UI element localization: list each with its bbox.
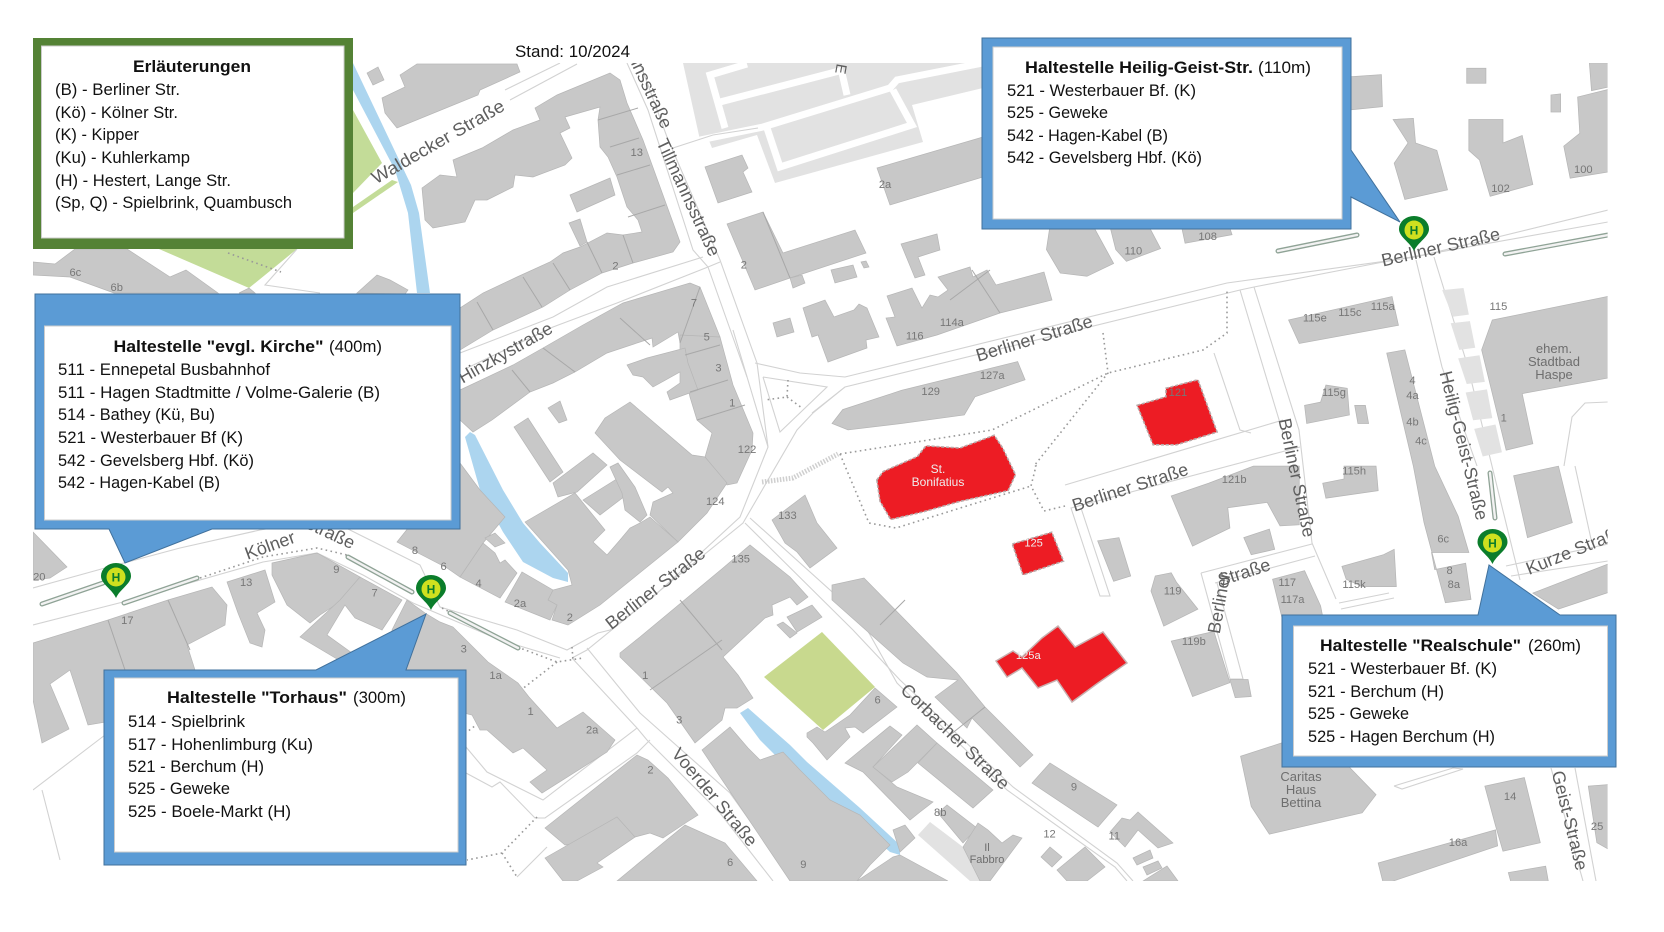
house numbers: 2a [879,179,892,191]
callout: Haltestelle Torhaus: Haltestelle "Torhaus" [167,688,347,707]
callout: Haltestelle evgl. Kirche: (400m) [329,337,382,356]
map place names: Haus [1286,782,1317,797]
house numbers: 13 [631,147,643,159]
house numbers: 117 [1278,577,1296,589]
house numbers: 5 [704,332,710,344]
house numbers: 122 [738,444,756,456]
icon: bus stop pin Heilig-Geist-Str. [1399,216,1429,251]
street names: Berliner [1204,571,1234,635]
street names: Geist-Straße [1548,769,1592,872]
callout: Haltestelle Heilig-Geist-Str.: 521 - Westerbauer Bf. (K) [1007,81,1196,100]
house numbers: 2 [612,261,619,273]
house numbers: 2a [586,724,599,736]
icon: bus stop pin Torhaus [416,575,446,610]
street names: Berliner Straße [1275,416,1319,539]
icon: bus stop pin Heilig-Geist-Str.: H [1410,224,1418,238]
street names: Tillmannsstraße [605,8,677,132]
callout: Haltestelle evgl. Kirche: 542 - Gevelsberg Hbf. (Kö) [58,451,254,470]
house numbers: 7 [372,587,378,599]
street names: Hinzkystraße [455,318,556,387]
callout: Haltestelle evgl. Kirche [35,294,460,563]
map light areas [683,63,990,881]
map red building 125a [996,626,1127,702]
house numbers [33,147,1603,871]
house numbers: 1 [1501,412,1507,424]
house numbers: 121b [1222,474,1247,486]
house numbers: 133 [778,510,797,522]
house numbers: 119 [1164,585,1182,597]
map service roads [700,63,983,167]
house numbers: 115k [1342,579,1366,591]
house numbers: 8a [1448,579,1461,591]
house numbers: 4c [1415,436,1427,448]
street names: Voerder Straße [668,744,761,850]
callout: Haltestelle Torhaus: 517 - Hohenlimburg (Ku) [128,735,313,754]
callout: Haltestelle evgl. Kirche: 521 - Westerbauer Bf (K) [58,428,243,447]
house numbers: 115h [1342,465,1366,477]
house numbers: 20 [33,571,45,583]
footbridge [762,454,838,482]
street names: Kölner [242,527,298,564]
house numbers: 115c [1338,307,1362,319]
panel: Erläuterungen: (Kö) - Kölner Str. [55,103,178,122]
street names [242,8,1629,872]
house numbers: 6c [1437,533,1450,545]
house numbers: 110 [1124,246,1142,258]
map red buildings [877,380,1217,575]
map place names: Bonifatius [912,475,964,489]
house numbers: 14 [1504,791,1516,803]
callout: Haltestelle Torhaus [104,614,466,865]
house numbers: 3 [461,644,467,656]
map place names [912,341,1580,866]
callout: Haltestelle Heilig-Geist-Str.: 542 - Gevelsberg Hbf. (Kö) [1007,148,1202,167]
house numbers: 6 [875,695,881,707]
house numbers: 1 [642,670,648,682]
house numbers: 6 [440,561,447,573]
house numbers: 6c [69,267,82,279]
street names: Corbacher Straße [897,680,1014,794]
callout: Haltestelle Realschule: 521 - Westerbauer Bf. (K) [1308,659,1497,678]
callout: Haltestelle Realschule: Haltestelle "Realschule" [1320,636,1521,655]
house numbers: 124 [706,496,725,508]
callout: Haltestelle Torhaus: (300m) [353,688,406,707]
street names: Heilig-Geist-Straße [1436,369,1492,522]
map place names: ehem. [1536,341,1572,356]
house numbers: 108 [1198,231,1217,243]
house numbers: 125a [1016,650,1041,662]
callout: Haltestelle Heilig-Geist-Str.: (110m) [1258,58,1311,77]
house numbers: 1a [489,670,503,682]
map footpaths [200,253,1227,877]
callout: Haltestelle Torhaus: 525 - Geweke [128,779,230,798]
callout: Haltestelle Heilig-Geist-Str.: Haltestelle Heilig-Geist-Str. [1025,58,1253,77]
callout: Haltestelle Realschule [1282,565,1616,767]
street names: Tillmannsstraße [652,136,724,259]
house numbers: 115e [1303,313,1327,325]
callout: Haltestelle evgl. Kirche: 511 - Hagen Stadtmitte / Volme-Galerie (B) [58,383,380,402]
icon: bus stop pin Kölner Straße: H [112,570,120,584]
house numbers: 13 [240,577,252,589]
house numbers: 3 [715,362,722,374]
callout: Haltestelle evgl. Kirche: Haltestelle "evgl. Kirche" [114,337,324,356]
icon: bus stop pin Kölner Straße [101,563,131,598]
house numbers: 12 [1043,828,1056,840]
map water [353,63,900,855]
callout: Haltestelle Heilig-Geist-Str.: 525 - Geweke [1007,103,1108,122]
house numbers: 135 [731,553,750,565]
house numbers: 7 [691,298,697,310]
house numbers: 4 [476,578,482,590]
map place names: Stadtbad [1528,354,1580,369]
house numbers: 9 [800,859,806,871]
house numbers: 11 [1108,830,1120,842]
house numbers: 1 [528,706,534,718]
callout: Haltestelle Realschule: (260m) [1528,636,1581,655]
house numbers: 16a [1449,837,1468,849]
house numbers: 4b [1406,417,1419,429]
house numbers: 119b [1182,636,1206,648]
panel: Erläuterungen: (H) - Hestert, Lange Str. [55,171,231,190]
map place names: Haspe [1535,367,1573,382]
house numbers: 2a [514,598,527,610]
house numbers: 4a [1406,390,1419,402]
callout: Haltestelle Torhaus: 525 - Boele-Markt (H) [128,802,291,821]
house numbers: 17 [121,615,134,627]
house numbers: 4 [1409,375,1416,387]
house numbers: 129 [921,386,940,398]
callout: Haltestelle Realschule: 525 - Hagen Berchum (H) [1308,727,1495,746]
panel: Erläuterungen: (Ku) - Kuhlerkamp [55,148,190,167]
house numbers: 100 [1574,164,1593,176]
map place names: Bettina [1281,795,1322,810]
map place names: Caritas [1280,769,1322,784]
house numbers: 115 [1490,301,1507,313]
street names: Berliner Straße [1069,459,1191,516]
panel: Erläuterungen [33,38,353,249]
map place names: Il [984,842,990,854]
house numbers: 1 [729,397,735,409]
house numbers: 121 [1169,387,1187,399]
callout: Haltestelle Realschule: 525 - Geweke [1308,704,1409,723]
house numbers: 115g [1322,387,1346,399]
icon: bus stop pin Realschule [1478,529,1508,564]
panel: Erläuterungen: (B) - Berliner Str. [55,80,180,99]
house numbers: 114a [940,317,965,329]
map place names: St. [931,462,945,476]
house numbers: 115a [1371,301,1396,313]
street names: Kurze Straße [1523,520,1629,579]
callout: Haltestelle evgl. Kirche: 511 - Ennepetal Busbahnhof [58,360,270,379]
house numbers: 9 [333,564,339,576]
street names: Straße [301,512,358,553]
stand date: Stand: 10/2024 [515,42,630,61]
street names: Straße [1215,554,1273,590]
icon: bus stop pin Torhaus: H [427,582,435,596]
house numbers: 2 [567,612,573,624]
house numbers: 2 [647,765,654,777]
street names: Berliner Straße [601,543,709,633]
house numbers: 25 [1591,821,1603,833]
callout: Haltestelle evgl. Kirche: 542 - Hagen-Kabel (B) [58,473,220,492]
map place names: Fabbro [970,854,1004,866]
map parks [159,110,875,730]
street names: E [831,62,850,75]
callout: Haltestelle Realschule: 521 - Berchum (H) [1308,682,1444,701]
callout: Haltestelle Heilig-Geist-Str.: 542 - Hagen-Kabel (B) [1007,126,1168,145]
house numbers: 2 [741,259,747,271]
house numbers: 125 [1024,538,1043,550]
house numbers: 8b [934,807,946,819]
house numbers: 9 [1071,782,1077,794]
house numbers: 117a [1281,594,1305,606]
map buildings west [33,64,1178,881]
callout: Haltestelle evgl. Kirche: 514 - Bathey (Kü, Bu) [58,405,215,424]
house numbers: 127a [980,370,1005,382]
panel: Erläuterungen: Erläuterungen [133,57,251,76]
house numbers: 102 [1491,183,1510,195]
house numbers: 8 [412,545,418,557]
panel: Erläuterungen: (K) - Kipper [55,125,139,144]
street names: Berliner Straße [973,311,1095,366]
house numbers: 3 [676,715,682,727]
map buildings east [832,63,1616,884]
panel: Erläuterungen: (Sp, Q) - Spielbrink, Quambusch [55,193,292,212]
callout: Haltestelle Torhaus: 514 - Spielbrink [128,712,245,731]
street names: Berliner Straße [1379,224,1502,271]
icon: bus stop pin Realschule: H [1488,536,1497,550]
house numbers: 116 [906,331,924,343]
house numbers: 6b [111,282,123,294]
callout: Haltestelle Heilig-Geist-Str. [982,38,1400,229]
bus platforms [42,235,1608,648]
callout: Haltestelle Torhaus: 521 - Berchum (H) [128,757,264,776]
map party walls [108,108,1000,735]
house numbers: 6 [727,857,733,869]
street names: Waldecker Straße [368,96,508,188]
house numbers: 8 [1447,565,1453,577]
